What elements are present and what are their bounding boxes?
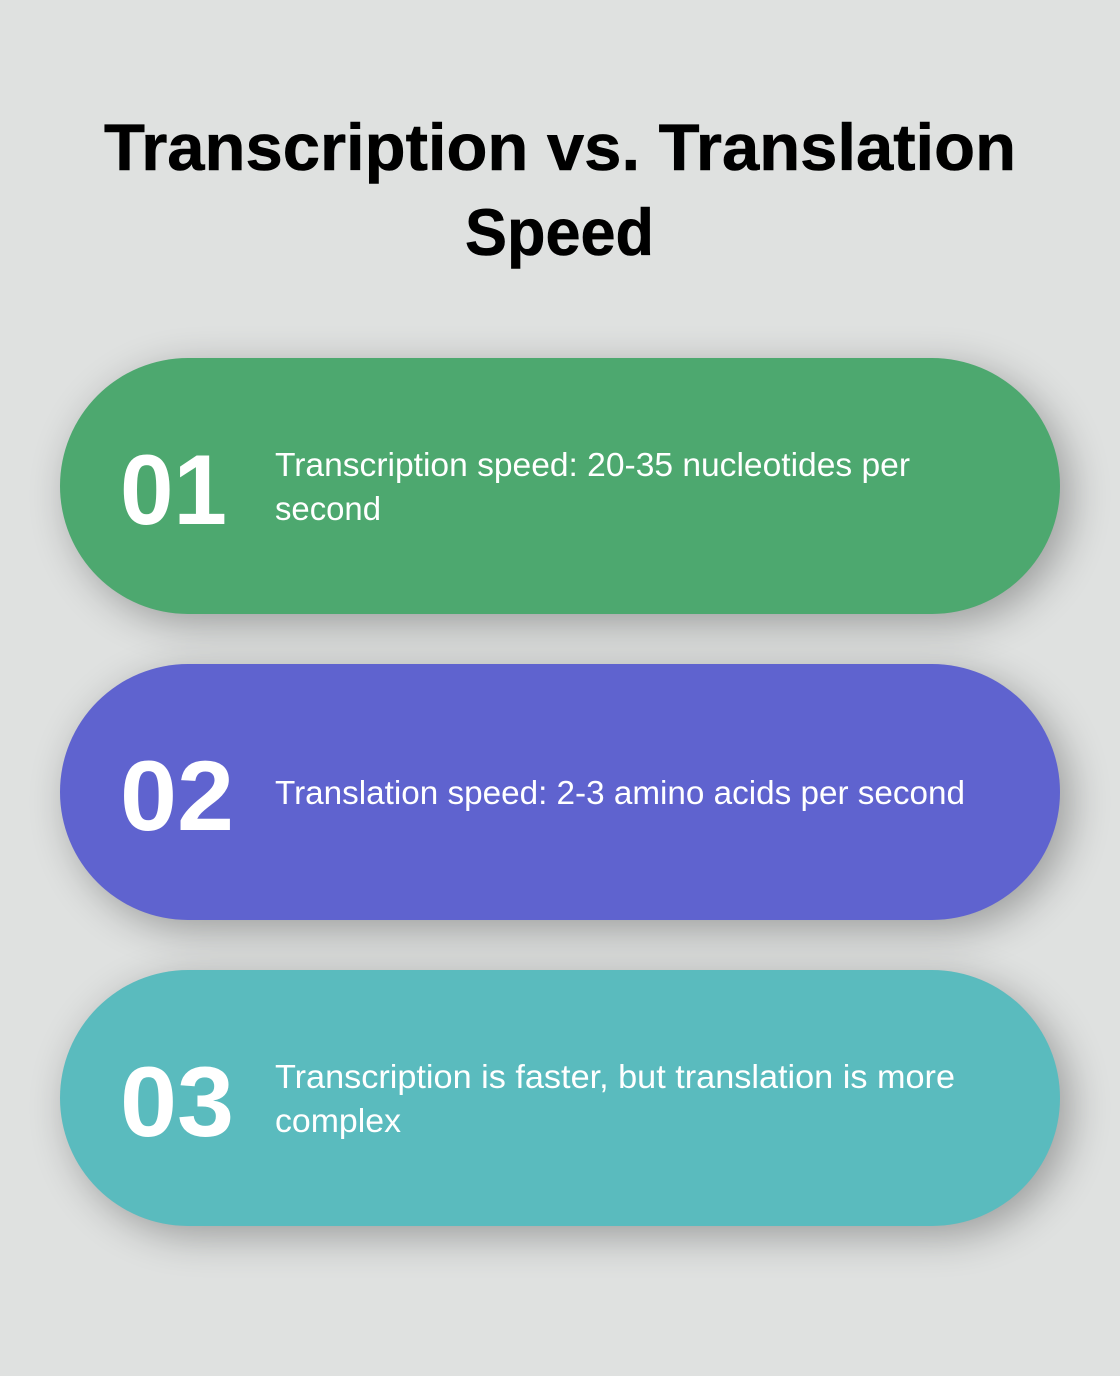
step 01 number and text [120, 434, 910, 545]
step 03 number and text [120, 1046, 955, 1157]
title: Speed [465, 195, 654, 269]
step 01 number and text: 01 [120, 434, 227, 545]
step 03 number and text: complex [275, 1102, 402, 1139]
panel: step 03 comparison [60, 970, 1060, 1226]
step 01 number and text: second [275, 490, 381, 527]
step 01 number and text: Transcription speed: 20-35 nucleotides per [275, 446, 910, 483]
title [104, 110, 1016, 269]
step 02 number and text: Translation speed: 2-3 amino acids per second [275, 774, 965, 811]
panel: step 01 transcription speed [60, 358, 1060, 614]
step 03 number and text: 03 [120, 1046, 234, 1157]
title: Transcription vs. Translation [104, 110, 1016, 184]
step 02 number and text [120, 740, 965, 851]
step 02 number and text: 02 [120, 740, 234, 851]
step 03 number and text: Transcription is faster, but translation is more [275, 1058, 955, 1095]
panel: step 02 translation speed [60, 664, 1060, 920]
